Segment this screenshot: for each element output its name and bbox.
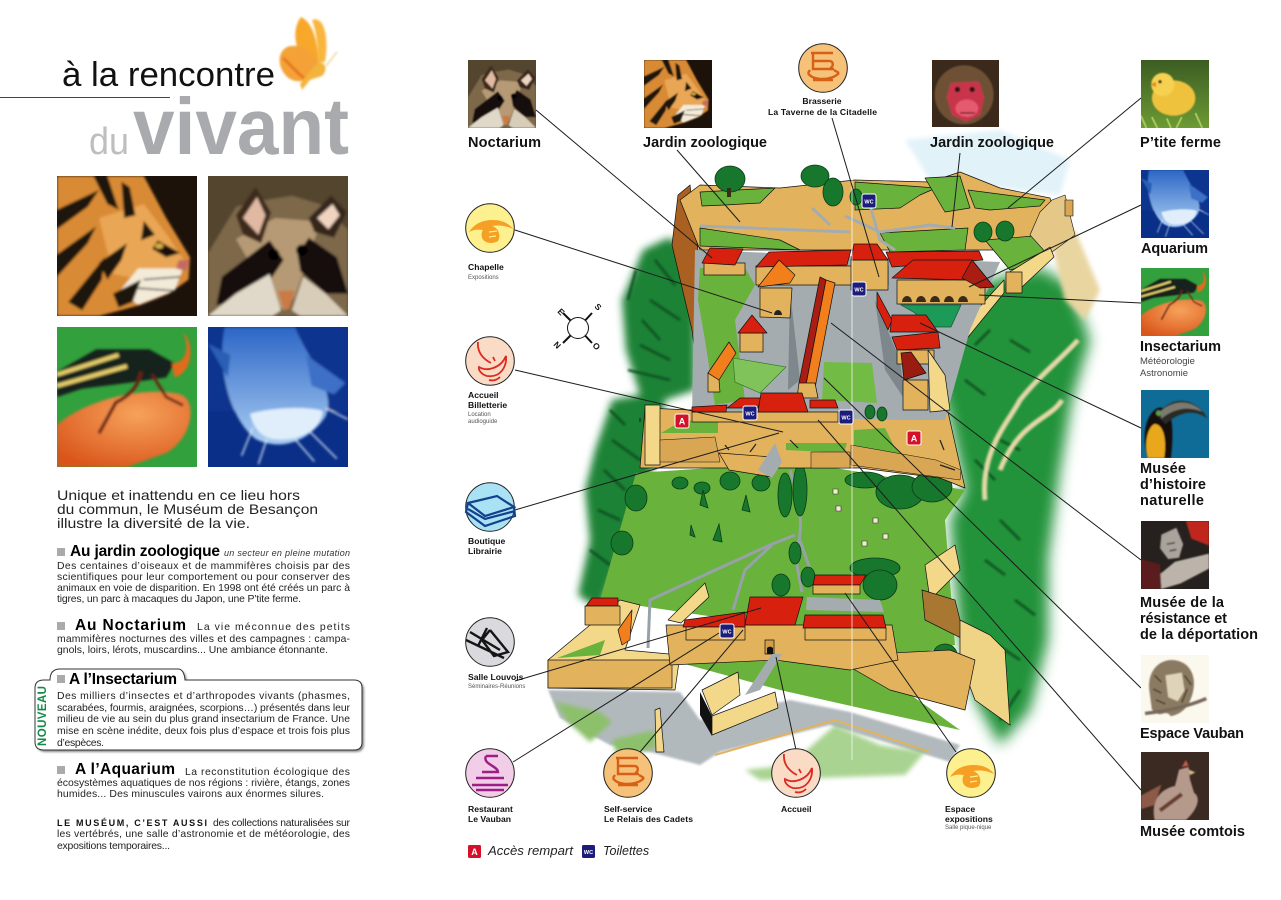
panel: insectarium callout: scarabées, fourmis, araignées, scorpions…) présentés dans leur — [57, 703, 351, 714]
label: boutique: Librairie — [468, 546, 502, 556]
panel: insectarium callout: Des milliers d’insectes et d’arthropodes vivants (phasmes, — [57, 691, 350, 702]
label: musée de la résistance: résistance et — [1140, 611, 1227, 627]
section: jardin zoologique — [57, 543, 350, 605]
middle fortifications — [640, 405, 965, 488]
label: self-service — [604, 804, 693, 824]
label: insectarium: Météorologie — [1140, 356, 1195, 367]
label: boutique: Boutique — [468, 536, 505, 546]
label: musée de la résistance: de la déportation — [1140, 627, 1258, 643]
section: jardin zoologique: animaux en voie de disparition. En 1998 ont été créés un parc à — [57, 583, 350, 594]
section: le muséum — [57, 818, 351, 852]
label: insectarium: Insectarium — [1140, 339, 1221, 355]
legend: Accès rempart — [487, 844, 574, 858]
courtyard — [692, 250, 1000, 420]
intro text: illustre la diversité de la vie. — [57, 515, 250, 531]
photo: toucan — [1141, 390, 1209, 458]
badge: wc: WC — [841, 416, 851, 422]
section: jardin zoologique: Au jardin zoologique — [70, 543, 220, 560]
intro text — [57, 487, 318, 531]
label: accueil: Accueil — [781, 804, 812, 814]
section: aquarium — [57, 761, 350, 800]
badge: wc: WC — [745, 412, 755, 418]
label: espace expositions: Salle pique-nique — [945, 825, 992, 831]
panel: insectarium callout: d’espèces. — [57, 738, 104, 749]
icon: boutique — [466, 483, 515, 531]
section: jardin zoologique: scientifiques pour leur comportement ou pour conserver des — [57, 572, 350, 583]
badge: wc — [839, 410, 853, 424]
lower lawn — [600, 462, 965, 668]
label: accueil billetterie: audioguide — [468, 419, 498, 425]
icon: espace expositions — [947, 749, 995, 797]
badge: wc: WC — [854, 288, 864, 294]
compass: O — [591, 340, 603, 352]
compass: N — [552, 339, 563, 351]
section: noctarium: gnols, loirs, lérots, muscardins... Une ambiance étonnante. — [57, 645, 328, 656]
forest surrounding — [578, 238, 695, 610]
photo: noctarium — [468, 60, 536, 128]
label: musée d'histoire naturelle: naturelle — [1140, 493, 1204, 509]
label: chapelle: Expositions — [468, 275, 499, 281]
badge: wc — [720, 624, 734, 638]
road at bottom — [548, 690, 960, 765]
badge: wc — [862, 194, 876, 208]
badge: rempart — [675, 414, 689, 428]
label: chapelle: Chapelle — [468, 262, 504, 272]
label: salle louvois: Séminaires-Réunions — [468, 684, 525, 690]
leader lines — [513, 98, 1141, 790]
label: espace expositions: expositions — [945, 814, 993, 824]
sky — [905, 130, 1070, 195]
right bastions — [925, 545, 960, 600]
legend: A — [471, 847, 478, 857]
label: chapelle — [468, 262, 504, 281]
section: jardin zoologique: un secteur en pleine mutation — [224, 548, 350, 558]
fold — [851, 150, 853, 760]
badge: wc: WC — [722, 630, 732, 636]
photo: rooster — [1141, 752, 1209, 820]
compass: E — [556, 306, 567, 318]
nouveau label: NOUVEAU — [37, 686, 49, 746]
label: accueil billetterie: Location — [468, 412, 491, 418]
label: musée de la résistance — [1140, 595, 1258, 643]
lawn trees — [611, 464, 957, 666]
photo: insectarium — [1141, 268, 1209, 336]
photo: tiger — [57, 176, 197, 316]
title word: du: du — [89, 121, 129, 163]
label: restaurant: Le Vauban — [468, 814, 511, 824]
label: accueil billetterie: Billetterie — [468, 400, 507, 410]
label: musée d'histoire naturelle — [1140, 461, 1206, 509]
title — [0, 56, 349, 171]
section: aquarium: humides... Des minuscules vairons aux énormes silures. — [57, 789, 324, 800]
intro text: du commun, le Muséum de Besançon — [57, 501, 318, 517]
label: espace expositions: Espace — [945, 804, 975, 814]
label: noctarium: Noctarium — [468, 135, 541, 151]
icon: butterfly — [280, 17, 337, 90]
section: noctarium — [57, 617, 350, 656]
photo: beetle on finger — [57, 327, 197, 467]
label: jardin zoologique: Jardin zoologique — [930, 135, 1054, 151]
label: brasserie: La Taverne de la Citadelle — [768, 107, 877, 117]
label: aquarium: Aquarium — [1141, 241, 1208, 257]
label: self-service: Self-service — [604, 804, 652, 814]
legend: Toilettes — [603, 844, 649, 858]
label: boutique — [468, 536, 505, 556]
icon: chapelle — [466, 204, 514, 252]
paths — [648, 470, 812, 648]
label: brasserie — [768, 96, 877, 117]
photo: catfish — [208, 327, 348, 467]
label: salle louvois — [468, 672, 525, 690]
photo: vauban — [1141, 655, 1209, 723]
icon: brasserie — [799, 44, 847, 92]
upper plateau — [680, 165, 1075, 363]
photo: chick — [1141, 60, 1209, 128]
section: le muséum: les vertébrés, une salle d’astronomie et de météorologie, des — [57, 829, 350, 840]
label: restaurant: Restaurant — [468, 804, 513, 814]
badge: rempart: A — [679, 416, 686, 426]
badge: wc — [743, 406, 757, 420]
icon: salle louvois — [466, 618, 514, 666]
label: jardin zoologique: Jardin zoologique — [643, 135, 767, 151]
panel: insectarium callout — [35, 669, 364, 752]
section: jardin zoologique: tigres, un parc à macaques du Japon, une P’tite ferme. — [57, 594, 301, 605]
section: aquarium: écosystèmes aquatiques de nos régions : rivière, étangs, zones — [57, 778, 350, 789]
buildings — [692, 244, 994, 422]
label: brasserie: Brasserie — [802, 96, 842, 106]
intro text: Unique et inattendu en ce lieu hors — [57, 487, 300, 503]
photo: dormouse — [208, 176, 348, 316]
panel: insectarium callout: A l’Insectarium — [69, 671, 177, 688]
section: noctarium: mammifères nocturnes des villes et des campagnes : campa- — [57, 634, 350, 645]
label: salle louvois: Salle Louvois — [468, 672, 524, 682]
rock — [1052, 230, 1100, 320]
label: espace expositions — [945, 804, 993, 831]
map: citadel illustration — [548, 130, 1100, 780]
section: le muséum: expositions temporaires... — [57, 841, 170, 852]
badge: wc — [852, 282, 866, 296]
label: musée d'histoire naturelle: d’histoire — [1140, 477, 1206, 493]
compass — [552, 301, 604, 352]
compass: S — [593, 301, 604, 313]
label: accueil billetterie — [468, 390, 507, 425]
section: le muséum: des collections naturalisées sur — [213, 818, 351, 829]
label: insectarium — [1140, 339, 1221, 379]
panel: insectarium callout: mise en scène inédite, deux fois plus d’espace et trois fois plus — [57, 726, 350, 737]
label: musée comtois: Musée comtois — [1140, 824, 1245, 840]
photo: aquarium — [1141, 170, 1209, 238]
title line 1: à la rencontre — [62, 56, 275, 94]
lower buildings — [548, 575, 898, 752]
title word: vivant: vivant — [133, 82, 349, 171]
label: musée de la résistance: Musée de la — [1140, 595, 1225, 611]
label: musée d'histoire naturelle: Musée — [1140, 461, 1186, 477]
section: noctarium: Au Noctarium — [75, 617, 186, 634]
section: noctarium: La vie méconnue des petits — [197, 622, 350, 633]
photo: monkey — [932, 60, 999, 127]
icon: self-service — [604, 749, 652, 797]
badge: rempart — [907, 431, 921, 445]
photo: résistance — [1141, 521, 1209, 589]
cliff — [672, 185, 718, 395]
badge: wc: WC — [864, 200, 874, 206]
badge: rempart: A — [911, 434, 918, 444]
legend — [468, 844, 649, 858]
photo: tiger zoo — [644, 60, 712, 128]
section: aquarium: La reconstitution écologique des — [185, 767, 350, 778]
label: espace vauban: Espace Vauban — [1140, 726, 1244, 742]
section: le muséum: LE MUSÉUM, C’EST AUSSI — [57, 818, 207, 828]
label: restaurant — [468, 804, 513, 824]
legend: WC — [584, 850, 593, 856]
label: self-service: Le Relais des Cadets — [604, 814, 693, 824]
panel: insectarium callout: milieu de vie au sein du plus grand insectarium de France. Une — [57, 714, 350, 725]
section: jardin zoologique: Des centaines d’oiseaux et de mammifères choisis par des — [57, 561, 350, 572]
label: insectarium: Astronomie — [1140, 368, 1188, 379]
label: accueil billetterie: Accueil — [468, 390, 499, 400]
icon: accueil billetterie — [466, 337, 514, 385]
icon: restaurant — [466, 749, 514, 797]
label: p'tite ferme: P’tite ferme — [1140, 135, 1221, 151]
section: aquarium: A l’Aquarium — [75, 761, 175, 778]
icon: accueil — [772, 749, 820, 797]
